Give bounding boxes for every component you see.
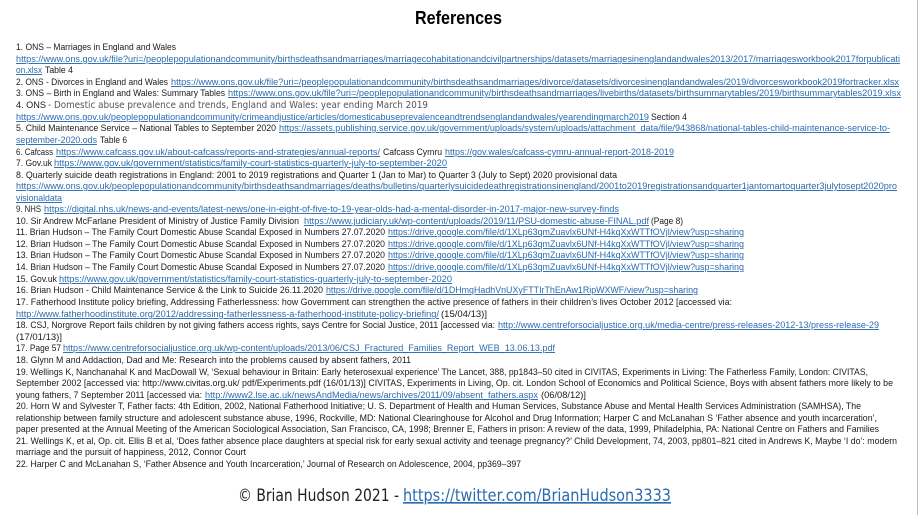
footer credit: [238, 486, 671, 505]
reference 4: Section 4: [651, 112, 687, 123]
reference 1: on.xlsx: [16, 65, 42, 76]
reference 22: 22. Harper C and McLanahan S, ‘Father Absence and Youth Incarceration,’ Journal of Research on Adolescence, 2004, pp369–397: [16, 459, 521, 470]
reference 12: [16, 239, 744, 250]
reference 8: visionaldata: [16, 193, 63, 204]
reference 17: 17. Fatherhood Institute policy briefing, Addressing Fatherlessness: how Government can strengthen the active presence of fathers in their children’s lives October 2012 [accessed via:: [16, 297, 732, 308]
reference 7: https://www.gov.uk/government/statistics/family-court-statistics-quarterly-july-to-september-2020: [54, 158, 447, 169]
reference 19: http://www2.lse.ac.uk/newsAndMedia/news/archives/2011/09/absent_fathers.aspx: [205, 390, 538, 401]
reference 7: 7. Gov.uk: [16, 158, 52, 169]
reference 12: 12. Brian Hudson – The Family Court Domestic Abuse Scandal Exposed in Numbers 27.07.2020: [16, 239, 385, 250]
reference 5: https://assets.publishing.service.gov.uk/government/uploads/system/uploads/attachment_data/file/943868/national-tables-child-maintenance-service-to-: [279, 123, 890, 134]
reference 4: - Domestic abuse prevalence and trends, England and Wales: year ending March 2019: [48, 100, 428, 111]
reference 8: [16, 170, 897, 204]
reference 6: [16, 147, 674, 158]
reference 1: 1. ONS – Marriages in England and Wales: [16, 42, 176, 53]
reference 4: https://www.ons.gov.uk/peoplepopulationandcommunity/crimeandjustice/articles/domesticabuseprevalenceandtrendsenglandandwales/yearendingmarch2019: [16, 112, 649, 123]
reference 11: 11. Brian Hudson – The Family Court Domestic Abuse Scandal Exposed in Numbers 27.07.2020: [16, 227, 385, 238]
reference 5: [16, 123, 890, 146]
reference 19: [16, 367, 893, 401]
reference 6: 6. Cafcass: [16, 147, 53, 158]
reference 1: https://www.ons.gov.uk/file?uri=/peoplepopulationandcommunity/birthsdeathsandmarriages/marriagecohabitationandcivilpartnerships/datasets/marriagesinenglandandwales2013/2017/marriagesworkbook2017forpublicati: [16, 54, 900, 65]
reference 20: [16, 401, 879, 435]
reference 17 page 57: https://www.centreforsocialjustice.org.uk/wp-content/uploads/2013/06/CSJ_Fractured_Families_Report_WEB_13.06.13.pdf: [63, 343, 555, 354]
reference 3: 3. ONS – Birth in England and Wales: Summary Tables: [16, 88, 225, 99]
reference 1: Table 4: [45, 65, 73, 76]
reference 5: september-2020.ods: [16, 135, 97, 146]
reference 20: 20. Horn W and Sylvester T, Father facts: 4th Edition, 2002, National Fatherhood Initiative; U. S. Department of Health and Human Services, Substance Abuse and Mental Health Services Administration (SAMHSA), The: [16, 401, 861, 412]
reference 10: (Page 8): [651, 216, 683, 227]
reference 18: [16, 320, 879, 343]
reference 18: (17/01/13)]: [16, 332, 62, 343]
reference 15: 15. Gov.uk: [16, 274, 57, 285]
reference 14: [16, 262, 744, 273]
reference 13: [16, 250, 744, 261]
reference 4: [16, 100, 687, 123]
reference 6: https://www.cafcass.gov.uk/about-cafcass/reports-and-strategies/annual-reports/: [56, 147, 380, 158]
reference 18: http://www.centreforsocialjustice.org.uk/media-centre/press-releases-2012-13/press-release-29: [498, 320, 879, 331]
reference 16: 16. Brian Hudson - Child Maintenance Service & the Link to Suicide 26.11.2020: [16, 285, 323, 296]
reference 3: https://www.ons.gov.uk/file?uri=/peoplepopulationandcommunity/birthsdeathsandmarriages/livebirths/datasets/birthsummarytables/2019/birthsummarytables2019.xlsx: [228, 88, 901, 99]
reference 19: young fathers, 7 September 2011 [accessed via:: [16, 390, 202, 401]
reference 16: [16, 285, 698, 296]
reference 10: https://www.judiciary.uk/wp-content/uploads/2019/11/PSU-domestic-abuse-FINAL.pdf: [304, 216, 649, 227]
title: References: [415, 7, 502, 28]
reference 18: 18. CSJ, Norgrove Report fails children by not giving fathers access rights, says Centre for Social Justice, 2011 [accessed via:: [16, 320, 495, 331]
reference 11: [16, 227, 744, 238]
reference 2: 2. ONS - Divorces in England and Wales: [16, 77, 168, 88]
reference 18 Glynn: 18. Glynn M and Addaction, Dad and Me: Research into the problems caused by absent fathers, 2011: [16, 355, 411, 366]
reference 6: Cafcass Cymru: [383, 147, 442, 158]
reference 21: [16, 436, 897, 458]
reference 17: [16, 297, 732, 320]
reference 6: https://gov.wales/cafcass-cymru-annual-report-2018-2019: [445, 147, 674, 158]
footer credit: © Brian Hudson 2021 -: [238, 486, 399, 505]
reference 13: 13. Brian Hudson – The Family Court Domestic Abuse Scandal Exposed in Numbers 27.07.2020: [16, 250, 385, 261]
reference 17: http://www.fatherhoodinstitute.org/2012/addressing-fatherlessness-a-fatherhood-institute-policy-briefing/: [16, 309, 439, 320]
reference 21: marriage and the pursuit of happiness, 2012, Connor Court: [16, 447, 246, 458]
reference 11: https://drive.google.com/file/d/1XLp63qmZuavlx6UNf-H4kqXxWTTfOVjl/view?usp=sharing: [388, 227, 744, 238]
reference 4: 4. ONS: [16, 100, 46, 111]
reference 12: https://drive.google.com/file/d/1XLp63qmZuavlx6UNf-H4kqXxWTTfOVjl/view?usp=sharing: [388, 239, 744, 250]
reference 8: 8. Quarterly suicide death registrations in England: 2001 to 2019 registrations and Quarter 1 (Jan to Mar) to Quarter 3 (July to Sept) 2020 provisional data: [16, 170, 618, 181]
reference 16: https://drive.google.com/file/d/1DHmqHadhVnUXyFTTIrThEnAw1RipWXWF/view?usp=sharing: [326, 285, 698, 296]
reference 9: 9. NHS: [16, 204, 41, 215]
reference 17: (15/04/13)]: [441, 309, 487, 320]
reference 14: https://drive.google.com/file/d/1XLp63qmZuavlx6UNf-H4kqXxWTTfOVjl/view?usp=sharing: [388, 262, 744, 273]
reference 10: 10. Sir Andrew McFarlane President of Ministry of Justice Family Division: [16, 216, 299, 227]
reference 19: (06/08/12)]: [541, 390, 586, 401]
reference 17 page 57: 17. Page 57: [16, 343, 61, 354]
reference 15: https://www.gov.uk/government/statistics/family-court-statistics-quarterly-july-to-september-2020: [59, 274, 452, 285]
reference 5: Table 6: [100, 135, 127, 146]
reference 2: https://www.ons.gov.uk/file?uri=/peoplepopulationandcommunity/birthsdeathsandmarriages/divorce/datasets/divorcesinenglandandwales/2019/divorcesworkbook2019fortracker.xlsx: [171, 77, 899, 88]
reference 9: https://digital.nhs.uk/news-and-events/latest-news/one-in-eight-of-five-to-19-year-olds-had-a-mental-disorder-in-2017-major-new-survey-finds: [44, 204, 619, 215]
reference 8: https://www.ons.gov.uk/peoplepopulationandcommunity/birthsdeathsandmarriages/deaths/bulletins/quarterlysuicidedeathregistrationsinengland/2001to2019registrationsandquarter1jantomartoquarter3julytosept2020pro: [16, 181, 897, 192]
reference 10: [16, 216, 683, 227]
reference 1: [16, 42, 900, 76]
reference 14: 14. Brian Hudson – The Family Court Domestic Abuse Scandal Exposed in Numbers 27.07.2020: [16, 262, 385, 273]
footer credit: https://twitter.com/BrianHudson3333: [403, 486, 671, 505]
reference 5: 5. Child Maintenance Service – National Tables to September 2020: [16, 123, 276, 134]
reference 13: https://drive.google.com/file/d/1XLp63qmZuavlx6UNf-H4kqXxWTTfOVjl/view?usp=sharing: [388, 250, 744, 261]
reference 20: relationship between family structure and adolescent substance abuse, 1996, Rockville, MD: National Clearinghouse for Alcohol and Drug Information; Harper C and McLanahan S ‘Father absence and youth incarceration’,: [16, 413, 877, 424]
